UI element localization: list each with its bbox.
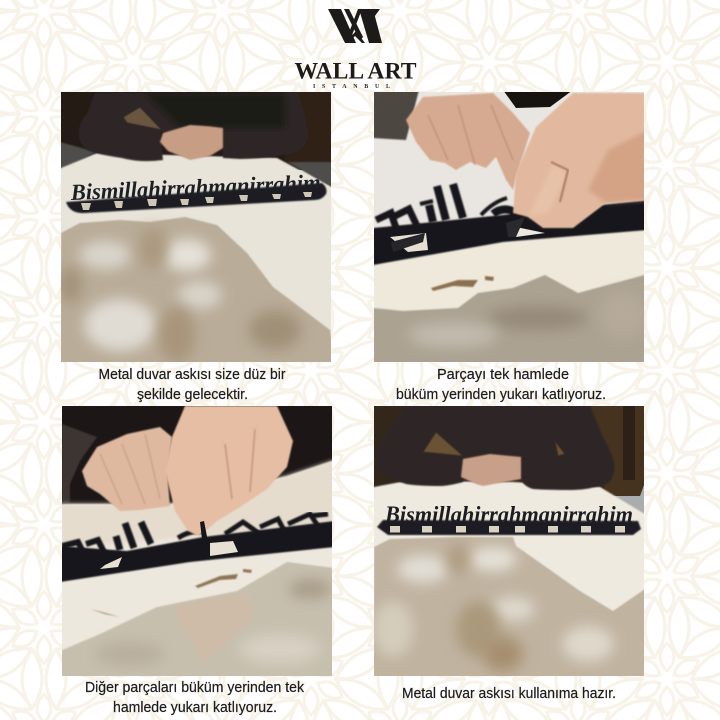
stains: [431, 276, 494, 291]
table top: [61, 152, 331, 334]
metal hanger: Bismillahirrahmanirrahim: [384, 502, 633, 527]
marble area: [58, 217, 335, 365]
sweater: [376, 406, 615, 490]
caption 3: hamlede yukarı katlıyoruz.: [113, 700, 277, 716]
caption 1: Metal duvar askısı size düz bir: [98, 367, 286, 383]
photo 4: finished hanger: [373, 404, 648, 679]
warm table glow: [60, 460, 335, 549]
logo wordmark: WALL ART: [294, 58, 416, 84]
dark background: [60, 404, 335, 504]
sweater: [79, 93, 308, 161]
logo monogram: [328, 9, 382, 43]
caption 2: Parçayı tek hamlede: [437, 367, 569, 383]
stains: [90, 569, 252, 617]
caption 3: [85, 680, 305, 716]
metal bar and letters: [373, 184, 648, 265]
gap between arm and body: [123, 107, 162, 130]
metal bar and letters: [60, 514, 335, 582]
bar cutouts: [390, 233, 428, 252]
photo 3: folding remaining tabs: [60, 404, 335, 679]
front hand: [513, 93, 648, 228]
caption 4: Metal duvar askısı kullanıma hazır.: [402, 686, 616, 702]
wall backdrop: [61, 92, 304, 170]
folded tab right: [506, 217, 525, 237]
rear hand: [82, 427, 172, 511]
hands: [160, 125, 223, 160]
cream table: [373, 228, 648, 311]
rear hand: [406, 93, 530, 190]
wall backdrop: [373, 404, 648, 499]
bar cutout right: [516, 227, 545, 237]
bar cutouts: [100, 541, 238, 569]
marble area: [60, 562, 335, 679]
photo 1: flat hanger on marble table: [58, 90, 335, 365]
caption 3: Diğer parçaları büküm yerinden tek: [85, 680, 305, 696]
hands: [461, 454, 521, 486]
metal hanger: Bismillahirrahmanirrahim: [69, 170, 321, 205]
caption 1: şekilde gelecektir.: [137, 387, 248, 403]
marble area: [373, 537, 648, 679]
logo subtitle: ISTANBUL: [313, 84, 390, 90]
table top: [374, 480, 644, 610]
caption 2: büküm yerinden yukarı katlıyoruz.: [396, 387, 606, 403]
photo 2: folding first tab: [373, 90, 648, 365]
folded tab left: [391, 233, 425, 252]
front hand: [165, 406, 293, 536]
caption 1: [98, 367, 286, 403]
folded tab: [200, 521, 208, 538]
logo: [294, 9, 416, 84]
background sleeve: [373, 90, 419, 140]
gap between arm and body: [423, 432, 565, 456]
caption 2: [396, 367, 606, 403]
marble area: [373, 274, 648, 365]
